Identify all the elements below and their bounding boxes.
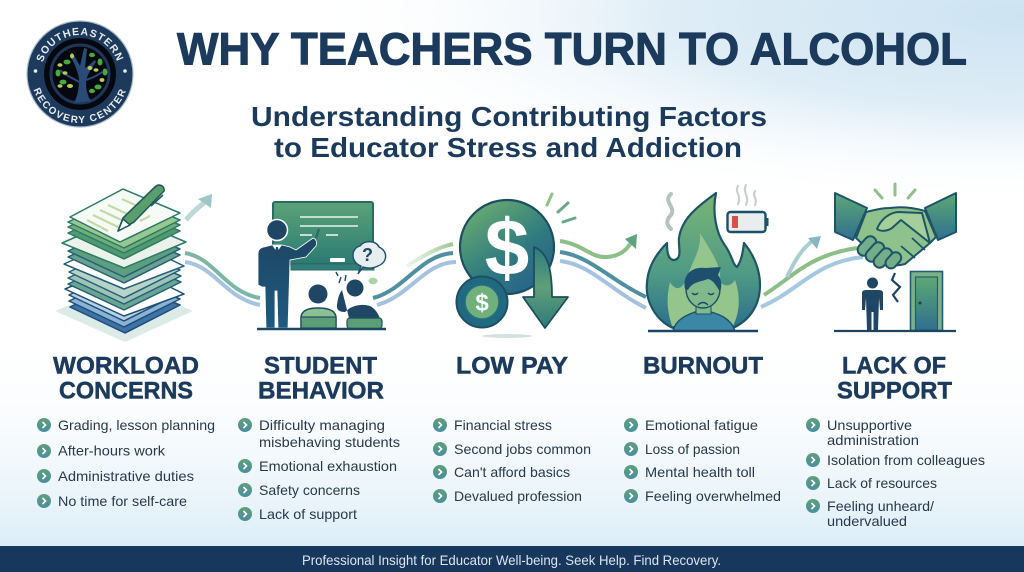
bullet list <box>238 417 400 522</box>
title: WHY TEACHERS TURN TO ALCOHOL <box>177 24 967 74</box>
column: lack of support <box>806 352 985 529</box>
door <box>910 272 942 330</box>
icon: falling dollar coins: $ <box>485 203 529 292</box>
bullet list: Administrative duties <box>58 468 194 484</box>
bullet list: Emotional exhaustion <box>259 458 397 474</box>
footer bar <box>0 546 1024 572</box>
footer bar: Professional Insight for Educator Well-being. Seek Help. Find Recovery. <box>302 552 721 568</box>
heading <box>837 352 952 404</box>
column: student behavior <box>238 352 400 522</box>
column: workload concerns <box>37 352 215 509</box>
lightning crack <box>892 273 900 302</box>
connecting wave: burnout to lack of support <box>761 236 863 307</box>
connecting wave: workload to student behavior <box>185 194 260 305</box>
connecting wave: student behavior to low pay <box>373 244 456 305</box>
bullet list: Can't afford basics <box>454 464 570 480</box>
handshake <box>835 193 956 271</box>
bullet list: Isolation from colleagues <box>827 452 985 468</box>
bullet list: Grading, lesson planning <box>58 417 215 433</box>
bullet list: Safety concerns <box>259 482 360 498</box>
bullet list: Difficulty managing <box>259 417 385 433</box>
heading: LOW PAY <box>456 352 568 380</box>
bullet list: Unsupportive <box>827 417 912 433</box>
smoke <box>667 185 756 229</box>
bullet list <box>37 417 215 509</box>
bullet list: administration <box>827 432 919 448</box>
bullet list: No time for self-care <box>58 493 187 509</box>
icon: teacher at chalkboard with students <box>257 202 386 329</box>
icon: burnout flame with battery <box>647 185 768 331</box>
icon: falling dollar coins: $ <box>475 290 489 316</box>
heading: WORKLOAD <box>53 352 199 380</box>
bullet list: Feeling overwhelmed <box>645 488 781 504</box>
heading: BURNOUT <box>643 352 763 380</box>
chalkboard <box>273 202 374 270</box>
bullet list <box>433 417 591 504</box>
isolated person <box>862 278 883 330</box>
bullet list: Mental health toll <box>645 464 755 480</box>
teacher <box>258 220 319 328</box>
seated students <box>301 272 382 328</box>
bullet list: Financial stress <box>454 417 552 433</box>
bullet list: Feeling unheard/ <box>827 498 934 514</box>
heading: LACK OF <box>842 352 946 380</box>
bullet list: After-hours work <box>58 442 166 458</box>
question bubble: ? <box>362 245 373 265</box>
bullet list <box>806 417 985 529</box>
person <box>673 267 735 331</box>
bullet list: Devalued profession <box>454 488 582 504</box>
heading: BEHAVIOR <box>258 378 384 404</box>
bullet list: misbehaving students <box>259 434 400 450</box>
heading <box>53 352 199 404</box>
logo: Southeastern Recovery Center badge: SOUTHEASTERN <box>36 28 124 62</box>
logo: Southeastern Recovery Center badge <box>26 20 134 128</box>
icon: stack of papers with pen <box>55 185 193 342</box>
column: burnout <box>624 352 781 504</box>
bullet list: Loss of passion <box>645 441 740 457</box>
heading: SUPPORT <box>837 378 952 404</box>
low battery <box>728 212 768 232</box>
bullet list: undervalued <box>827 513 907 529</box>
bullet list: Lack of support <box>259 506 357 522</box>
connecting wave: low pay to burnout <box>560 234 646 308</box>
bullet list: Emotional fatigue <box>645 417 758 433</box>
bullet list: Lack of resources <box>827 475 937 491</box>
subtitle <box>251 101 767 163</box>
bullet list <box>624 417 781 504</box>
icon: falling dollar coins <box>456 194 575 338</box>
heading: CONCERNS <box>59 378 193 404</box>
column: low pay <box>433 352 591 504</box>
subtitle: to Educator Stress and Addiction <box>274 132 742 163</box>
icon: handshake and isolated person at door <box>834 184 956 331</box>
heading: STUDENT <box>264 352 377 380</box>
logo: Southeastern Recovery Center badge: RECOVERY CENTER <box>34 88 126 123</box>
subtitle: Understanding Contributing Factors <box>251 101 767 132</box>
bullet list: Second jobs common <box>454 441 591 457</box>
heading <box>258 352 384 404</box>
